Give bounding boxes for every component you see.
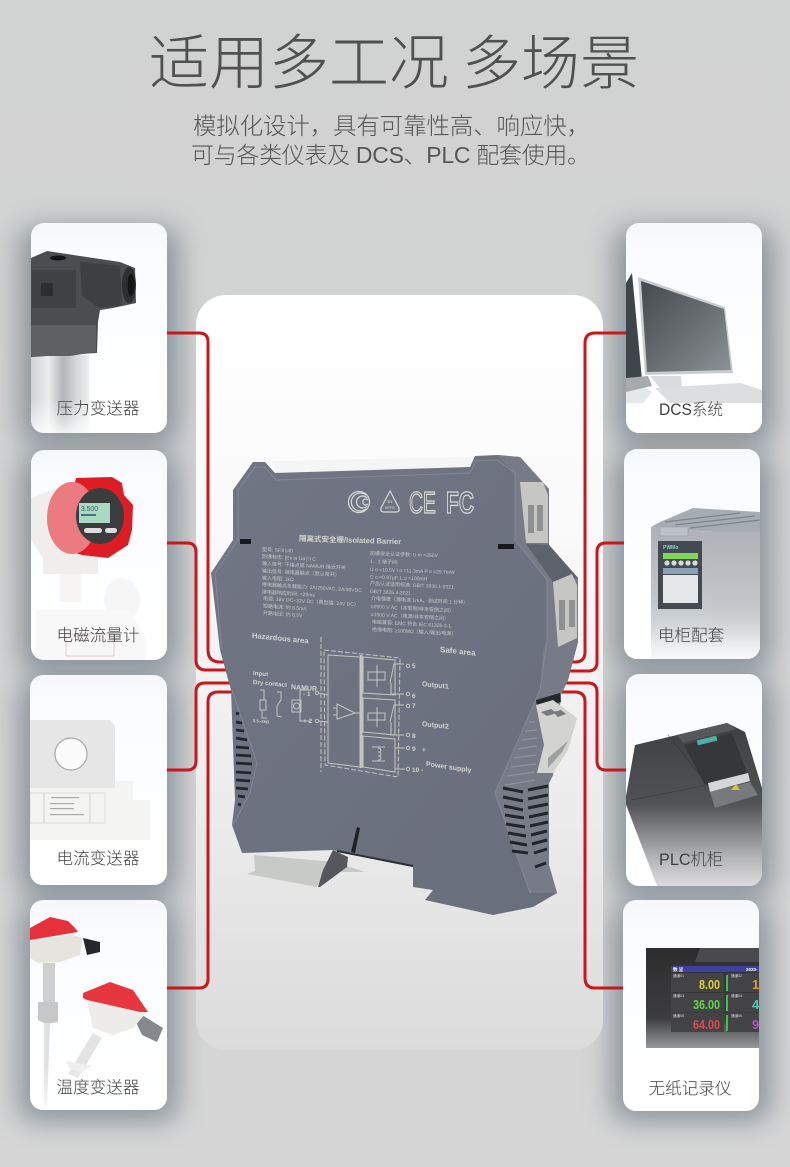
upper terminal block	[520, 482, 548, 543]
input labels: NAMUR	[291, 684, 317, 693]
device spec left column: 防爆标志: [Ex ia Ga] II C	[262, 553, 316, 563]
icon: recorder screen: 1	[752, 977, 759, 992]
plug connector	[536, 693, 577, 773]
device spec left column: 输入信号: 干接点或 NAMUR 接近开关	[262, 560, 346, 571]
icon: recorder screen: 36.00	[693, 997, 720, 1012]
card: PLC	[625, 674, 762, 886]
label: 温度变送器	[57, 1078, 139, 1097]
icon: monitor and keyboard	[626, 273, 762, 433]
icon: flowmeter: 3.500	[81, 506, 98, 513]
icon: recorder screen: 9	[752, 1017, 759, 1032]
label: PLC机柜	[659, 850, 723, 869]
icon: current transmitter	[30, 720, 167, 885]
icon: controller module	[624, 508, 760, 659]
card: current transmitter	[30, 675, 167, 885]
center panel	[196, 295, 603, 1050]
device spec right column: ≥1500 V AC（电源/非本安侧之间）	[371, 611, 449, 622]
terminal numbers: 7	[412, 703, 416, 710]
label: 无纸记录仪	[649, 1079, 731, 1098]
device spec right column: U o =10.5V I o =11.3mA P o =29.7mW	[370, 567, 455, 576]
icon: pressure transmitter	[31, 251, 167, 435]
output labels: Output1	[422, 681, 449, 691]
slots	[240, 539, 514, 549]
label: DCS系统	[659, 400, 723, 419]
device silhouette	[211, 455, 578, 915]
device spec left column	[262, 546, 362, 619]
safe area label: Safe area	[440, 645, 476, 658]
device side wall	[495, 455, 578, 893]
device spec right column: 电磁兼容: EMC 符合 IEC 61326-3-1	[372, 619, 451, 630]
device spec left column: 继电器响应时间: <20ms	[262, 589, 315, 599]
device spec left column: 输出信号: 继电器触点（默认常开）	[262, 568, 340, 579]
icon: recorder screen: 4	[752, 997, 760, 1012]
terminal numbers: 8	[412, 733, 416, 740]
device edge highlight	[215, 460, 547, 893]
left vents	[236, 713, 252, 805]
icon: recorder screen: 通道05	[673, 1013, 684, 1018]
card: pressure transmitter	[31, 223, 167, 435]
icon: recorder screen: 8.00	[699, 977, 720, 992]
card: electromagnetic flowmeter	[31, 450, 167, 660]
output labels	[422, 681, 471, 774]
icon: controller module: PWMo	[663, 545, 678, 551]
output labels: Output2	[422, 721, 449, 731]
certification marks: FC	[446, 485, 474, 520]
terminal numbers: 5	[412, 663, 416, 670]
device spec right column	[370, 550, 470, 637]
terminal numbers: - 1	[303, 691, 311, 698]
device heading: 隔离式安全栅/Isolated Barrier	[299, 533, 401, 546]
device spec left column: 短路电流: 约 8.5mA	[263, 603, 307, 612]
right vents	[503, 786, 548, 867]
device spec right column: 介电强度（漏电流 1mA，测试时间 1 分钟）:	[371, 595, 470, 606]
top light strip	[272, 457, 472, 474]
icon: recorder screen: 数 显	[673, 966, 684, 973]
wiring diagram	[260, 637, 410, 777]
device spec left column: 输入电阻: 1kΩ	[262, 575, 294, 583]
device spec right column: GB/T 3836.4-2021	[370, 589, 411, 597]
input labels: 0.5~2kΩ	[253, 718, 270, 724]
icon: recorder screen	[646, 948, 760, 1048]
card: DCS	[626, 223, 762, 433]
subtitle line 1: 模拟化设计，具有可靠性高、响应快，	[193, 113, 590, 139]
device spec right column: ≥2500 V AC（本安侧/非本安侧之间）	[371, 603, 454, 614]
label: 电磁流量计	[57, 626, 139, 645]
label: 压力变送器	[57, 399, 139, 418]
icon: recorder screen: 通道03	[673, 993, 684, 998]
device spec left column: 开路电压: 约 8.5V	[263, 610, 303, 619]
input labels: Input	[253, 670, 268, 678]
upper side vents (light)	[505, 722, 537, 785]
icon: recorder screen: 64.00	[693, 1017, 720, 1032]
certification marks: CE	[409, 485, 436, 520]
icon: flowmeter	[31, 477, 146, 660]
hazardous area label: Hazardous area	[252, 631, 309, 646]
terminal numbers: 6	[412, 693, 416, 700]
device spec left column: 电源: 18V DC~32V DC（典型值: 24V DC）	[263, 595, 359, 608]
output labels: Power supply	[426, 761, 471, 774]
device spec left column: 型号: SFX140	[262, 546, 293, 555]
terminal numbers: 9	[412, 746, 416, 753]
connector lines	[167, 333, 626, 988]
card: temperature transmitter	[30, 900, 167, 1110]
subtitle line 2: 可与各类仪表及 DCS、PLC 配套使用。	[191, 142, 590, 168]
card: cabinet	[624, 449, 760, 659]
input labels: Dry contact	[253, 679, 287, 689]
lower terminal block	[553, 574, 577, 647]
icon: PLC inverter	[625, 723, 762, 886]
certification marks: Ex	[388, 499, 393, 504]
label: 电流变送器	[57, 849, 139, 868]
icon: temperature sensors	[30, 917, 167, 1110]
title: 适用多工况	[149, 30, 449, 97]
terminal numbers: 10 -	[412, 767, 423, 774]
device spec left column: 继电器触点负载能力: 2A/250VAC, 2A/30VDC	[262, 581, 362, 594]
label: 电柜配套	[658, 626, 724, 645]
DIN rail clip	[247, 855, 365, 887]
input labels	[253, 670, 317, 724]
icon: recorder screen: 通道01	[673, 973, 684, 978]
device spec right column: C o =0.97μF, L o =100mH	[370, 575, 428, 583]
certification marks: NEPSI	[385, 506, 395, 510]
icon: recorder screen: 通道06	[731, 1013, 742, 1018]
device spec right column: 产品认证适用标准: GB/T 3836.1-2021,	[370, 580, 455, 591]
card: paperless recorder	[623, 900, 760, 1111]
device: isolated safety barrier	[211, 455, 578, 915]
latch	[318, 827, 413, 887]
device spec right column: 1、2 端子间:	[370, 558, 398, 566]
terminal numbers	[303, 663, 426, 774]
terminal numbers: + 2	[303, 718, 313, 725]
terminal numbers: +	[422, 747, 426, 754]
cavity between terminals	[526, 544, 578, 582]
certification marks	[348, 485, 474, 520]
title second part: 多场景	[462, 31, 639, 97]
icon: recorder screen: 2020-	[746, 967, 758, 972]
device spec right column: 防爆安全认证参数: U m =250V	[370, 550, 439, 559]
icon: recorder screen: 通道04	[731, 993, 742, 998]
icon: recorder screen: 通道02	[731, 973, 742, 978]
device spec right column: 绝缘电阻: ≥100MΩ（输入/输出/电源）	[372, 626, 457, 637]
